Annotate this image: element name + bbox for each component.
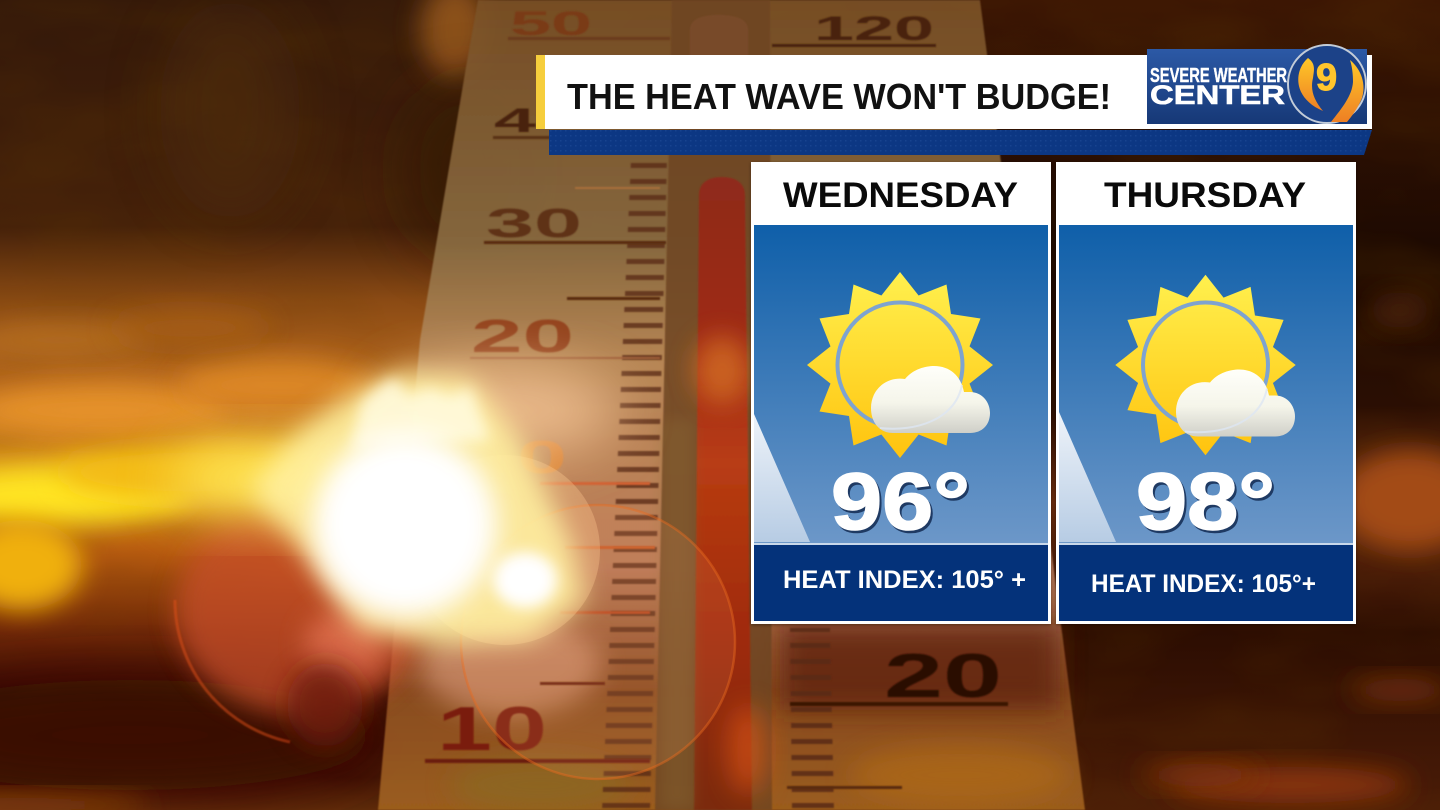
scale numbers and major lines <box>425 5 1008 789</box>
panel: Thursday forecast <box>1056 162 1356 624</box>
icon: channel 9 emblem <box>1288 45 1366 123</box>
scale numbers and major lines: 20 <box>884 642 1002 711</box>
blue sky area <box>1059 225 1353 543</box>
scale numbers and major lines: 120 <box>814 10 934 48</box>
title: THE HEAT WAVE WON'T BUDGE! <box>567 76 1111 117</box>
light wedge <box>754 414 810 542</box>
scale numbers and major lines: 50 <box>510 5 592 43</box>
sun pale flames <box>350 378 490 450</box>
scale numbers and major lines: 4 <box>494 102 536 140</box>
scale numbers and major lines: 10 <box>437 695 547 764</box>
banner blue strip <box>549 130 1372 155</box>
icon: sun with cloud <box>807 272 993 458</box>
day heading: WEDNESDAY <box>783 176 1018 215</box>
logo: Severe Weather Center 9: SEVERE WEATHER <box>1150 65 1287 87</box>
scale numbers and major lines: 30 <box>486 200 582 246</box>
day heading: THURSDAY <box>1104 176 1306 215</box>
flare disc large <box>461 505 735 779</box>
icon: sun with cloud <box>1115 275 1296 455</box>
banner white panel <box>545 55 1372 129</box>
temperature: 98° <box>1138 460 1277 550</box>
thermometer <box>378 0 1085 810</box>
red mercury column <box>694 177 752 810</box>
header banner <box>536 45 1372 155</box>
logo: Severe Weather Center 9: CENTER <box>1150 80 1285 110</box>
scale numbers and major lines: 20 <box>471 310 574 362</box>
temperature: 98° <box>1136 457 1275 547</box>
sun secondary hot spot <box>493 552 557 608</box>
logo: Severe Weather Center 9 <box>1147 45 1367 124</box>
heat index bar <box>754 543 1048 621</box>
panel frame <box>1056 162 1356 624</box>
panel frame <box>751 162 1051 624</box>
sun core <box>313 433 497 617</box>
banner yellow accent <box>536 55 545 129</box>
sun glare and lens flares <box>170 365 735 779</box>
scale numbers and major lines: 0 <box>517 431 567 483</box>
flare red haze left <box>175 505 425 715</box>
blue sky area <box>754 225 1048 543</box>
sun yellow halo <box>250 372 585 645</box>
icon: channel 9 emblem: 9 <box>1316 57 1337 99</box>
thermometer glass body <box>378 0 1085 810</box>
temperature: 96° <box>833 460 972 550</box>
thermometer tube <box>655 0 772 810</box>
heat index bar: HEAT INDEX: 105°+ <box>1091 570 1316 598</box>
heat index bar <box>1059 543 1353 621</box>
flare disc small <box>410 455 600 645</box>
scale ticks left <box>602 160 667 810</box>
scale ticks right <box>790 628 834 810</box>
temperature: 96° <box>831 457 970 547</box>
panel: Wednesday forecast <box>751 162 1051 624</box>
flare ring left arc <box>175 600 290 742</box>
heat index bar: HEAT INDEX: 105° + <box>783 566 1026 594</box>
light wedge <box>1059 412 1116 542</box>
